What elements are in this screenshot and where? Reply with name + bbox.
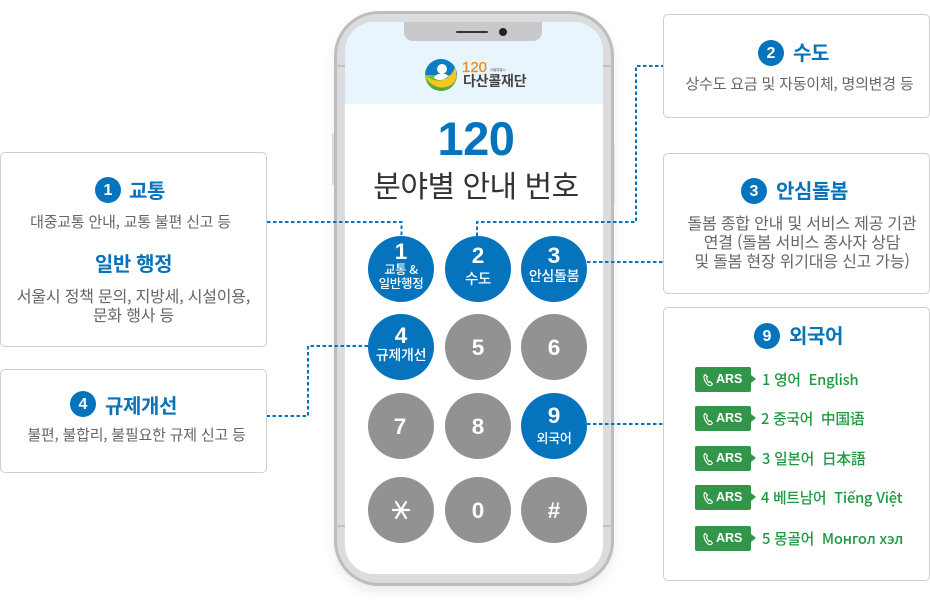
description: 서울시 정책 문의, 지방세, 시설이용, [17, 283, 250, 307]
key 4: 4 [395, 323, 407, 348]
key 0 [445, 477, 511, 543]
key 2: 2 [472, 243, 484, 268]
logo small text: 서울특별시 [490, 67, 506, 72]
key hash [521, 477, 587, 543]
badge 9: 9 [763, 328, 771, 345]
ARS tag: ARS [716, 411, 742, 425]
key 0: 0 [472, 498, 484, 523]
badge 4 [70, 391, 96, 417]
heading subtitle: 분야별 안내 번호 [373, 162, 579, 206]
panel: 4 규제개선 [0, 369, 267, 473]
label: 4 베트남어 Tiếng Việt [761, 487, 902, 508]
ARS row 2 [695, 406, 864, 431]
description: 및 돌봄 현장 위기대응 신고 가능) [694, 248, 910, 272]
ARS row 1 [695, 367, 858, 392]
key 7 [368, 393, 434, 459]
key hash: # [548, 498, 560, 523]
ARS row 3 [695, 446, 866, 471]
panel: 1 교통 / 일반 행정 [0, 152, 267, 347]
key 9 [521, 393, 587, 459]
badge 2 [758, 40, 784, 66]
logo: 120 다산콜재단 [425, 59, 526, 91]
screen header band [345, 22, 603, 104]
label: 5 몽골어 Монгол хэл [762, 528, 903, 549]
description [17, 283, 250, 326]
key 3: 안심돌봄 [529, 266, 579, 286]
key 1 [368, 236, 434, 302]
key 8: 8 [472, 414, 484, 439]
description [688, 210, 916, 272]
key 1: 일반행정 [379, 273, 423, 292]
logo 120: 120 [462, 59, 487, 76]
heading: 안심돌봄 [776, 175, 848, 204]
left side button [332, 133, 335, 185]
phone notch [404, 22, 542, 41]
description: 연결 (돌봄 서비스 종사자 상담 [704, 229, 900, 253]
panel: 2 수도 [663, 14, 930, 118]
key 4: 규제개선 [376, 345, 426, 365]
key 3: 3 [548, 243, 560, 268]
description: 불편, 불합리, 불필요한 규제 신고 등 [27, 424, 246, 445]
logo name: 다산콜재단 [463, 71, 526, 91]
phone illustration [332, 11, 615, 593]
keypad [368, 236, 587, 543]
camera [499, 28, 507, 36]
ARS tag [695, 406, 751, 431]
phone body [334, 11, 614, 586]
badge 4: 4 [79, 396, 87, 413]
ARS tag: ARS [716, 531, 742, 545]
key 2 [445, 236, 511, 302]
label: 1 영어 English [762, 369, 858, 390]
label: 2 중국어 中国语 [761, 408, 864, 429]
logo emblem [425, 59, 457, 91]
key 9: 9 [548, 403, 560, 428]
heading: 수도 [793, 37, 829, 66]
panel: 9 외국어 [663, 307, 930, 581]
key 9: 외국어 [536, 428, 571, 447]
description: 상수도 요금 및 자동이체, 명의변경 등 [686, 73, 914, 94]
ARS row 5 [695, 526, 903, 551]
ARS tag: ARS [716, 372, 742, 386]
key 4 [368, 314, 434, 380]
heading 일반 행정: 일반 행정 [95, 248, 172, 277]
key 3 [521, 236, 587, 302]
antenna bands [334, 65, 614, 527]
heading: 규제개선 [105, 390, 177, 419]
badge 3 [741, 178, 767, 204]
panel: 3 안심돌봄 [663, 153, 930, 294]
badge 3: 3 [750, 183, 758, 200]
ARS tag [695, 526, 751, 551]
description: 대중교통 안내, 교통 불편 신고 등 [30, 211, 231, 232]
heading 교통: 교통 [129, 175, 165, 204]
ARS tag [695, 446, 751, 471]
badge 1 [95, 177, 121, 203]
key 1: 1 [395, 239, 407, 264]
right side button [613, 143, 615, 203]
heading: 외국어 [789, 320, 843, 349]
badge 1: 1 [104, 182, 112, 199]
badge 2: 2 [767, 45, 775, 62]
ARS row 4 [695, 485, 902, 510]
key 2: 수도 [465, 268, 491, 289]
speaker [456, 31, 488, 33]
heading number 120: 120 [438, 112, 514, 165]
key 6 [521, 314, 587, 380]
ARS tag [695, 367, 751, 392]
ARS tag [695, 485, 751, 510]
label: 3 일본어 日本語 [762, 448, 865, 469]
key star [368, 477, 434, 543]
key 7: 7 [394, 414, 406, 439]
ARS tag: ARS [716, 490, 742, 504]
phone screen [345, 22, 603, 574]
description: 문화 행사 등 [93, 302, 174, 326]
key 5: 5 [472, 335, 484, 360]
key 1: 교통 & [384, 260, 418, 278]
badge 9 [754, 323, 780, 349]
key 5 [445, 314, 511, 380]
ARS tag: ARS [716, 451, 742, 465]
key 6: 6 [548, 335, 560, 360]
description: 돌봄 종합 안내 및 서비스 제공 기관 [688, 210, 916, 234]
key 8 [445, 393, 511, 459]
